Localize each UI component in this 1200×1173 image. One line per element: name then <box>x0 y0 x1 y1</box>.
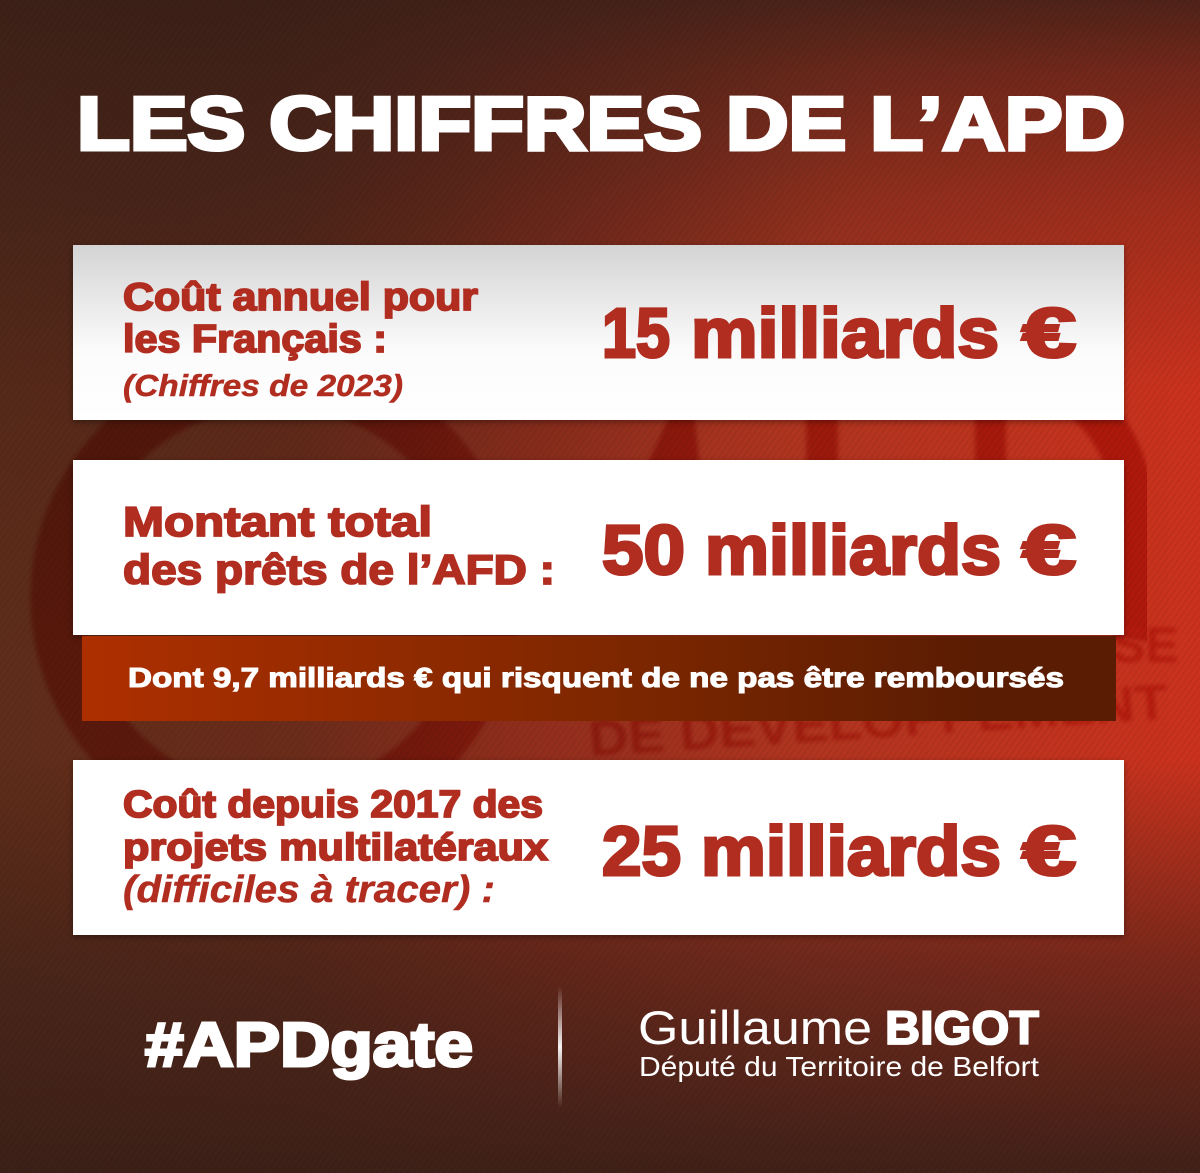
callout band: Dont 9,7 milliards € qui risquent de ne pas être remboursés <box>128 662 1064 693</box>
panel: annual cost <box>73 245 1124 420</box>
label: annual cost <box>123 276 478 403</box>
panel: total loans <box>73 460 1124 635</box>
value: 25 milliards <box>602 812 1076 890</box>
callout band <box>82 636 1116 721</box>
value: 15 milliards: 15 <box>602 294 670 372</box>
label: multilateral projects: Coût depuis 2017 des <box>123 784 543 826</box>
signature <box>638 1001 1039 1082</box>
watermark: AFD logo <box>57 380 1179 816</box>
value: 25 milliards: milliards <box>701 812 1001 890</box>
label: annual cost: les Français : <box>123 318 387 361</box>
signature: BIGOT <box>885 1001 1039 1054</box>
value: 25 milliards: € <box>1022 812 1076 890</box>
value: 50 milliards: 50 <box>602 511 685 589</box>
label: total loans <box>123 498 555 593</box>
watermark: AFD logo: DE DEVELOPPEMENT <box>587 674 1170 767</box>
label: multilateral projects: (difficiles à tracer) : <box>123 869 495 911</box>
watermark: AFD logo: SE <box>1112 617 1179 673</box>
label: multilateral projects <box>123 784 548 911</box>
hashtag: #APDgate <box>145 1011 473 1080</box>
label: total loans: Montant total <box>123 498 432 545</box>
value: 50 milliards <box>602 511 1076 589</box>
separator <box>558 986 562 1108</box>
value: 15 milliards <box>602 294 1076 372</box>
panel: multilateral projects <box>73 760 1124 935</box>
value: 15 milliards: milliards <box>691 294 999 372</box>
label: multilateral projects: projets multilatéraux <box>123 827 548 869</box>
value: 15 milliards: € <box>1022 294 1076 372</box>
title: LES CHIFFRES DE L’APD <box>77 82 1125 166</box>
label: total loans: des prêts de l’AFD : <box>123 546 555 593</box>
value: 25 milliards: 25 <box>602 812 681 890</box>
signature: Député du Territoire de Belfort <box>639 1051 1039 1082</box>
value: 50 milliards: € <box>1022 511 1076 589</box>
label: annual cost: Coût annuel pour <box>123 276 478 319</box>
signature: Guillaume <box>638 1001 872 1054</box>
label: annual cost: (Chiffres de 2023) <box>123 368 403 403</box>
value: 50 milliards: milliards <box>705 511 1001 589</box>
